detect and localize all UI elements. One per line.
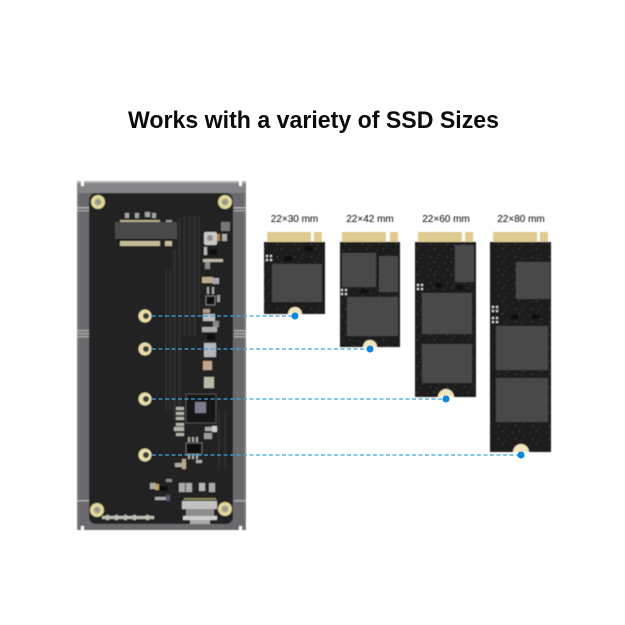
size label: 22×42 mm [346, 214, 394, 225]
panel: metal enclosure [77, 181, 246, 530]
NAND chips [342, 253, 398, 336]
panel: circuit board [89, 193, 233, 524]
NAND chip [272, 264, 322, 302]
SSD 22x60 [415, 214, 476, 397]
mounting notch [363, 340, 377, 347]
mounting notch [513, 444, 529, 452]
M.2 connector [115, 212, 177, 246]
blue endpoint dots [292, 312, 524, 458]
NAND chips [422, 245, 474, 383]
size label: 22×60 mm [422, 214, 470, 225]
SSD 22x80 [490, 214, 551, 452]
surface components [150, 222, 230, 501]
heat-spreader IC [186, 394, 216, 423]
USB-C port [182, 498, 217, 524]
SSD 22x30 [264, 214, 325, 314]
icon: standoff holes [138, 310, 152, 462]
mounting notch [438, 389, 454, 397]
size label: 22×80 mm [497, 214, 545, 225]
mounting notch [288, 307, 302, 314]
title: Works with a variety of SSD Sizes [128, 107, 499, 134]
enclosure with circuit board [77, 181, 246, 530]
size label: 22×30 mm [271, 214, 318, 225]
SSD 22x42 [340, 214, 400, 347]
board traces [165, 216, 226, 470]
dashed connector lines [152, 316, 521, 455]
NAND chips [496, 262, 550, 422]
bottom contact row [102, 515, 154, 520]
icon: corner screws [90, 195, 232, 517]
